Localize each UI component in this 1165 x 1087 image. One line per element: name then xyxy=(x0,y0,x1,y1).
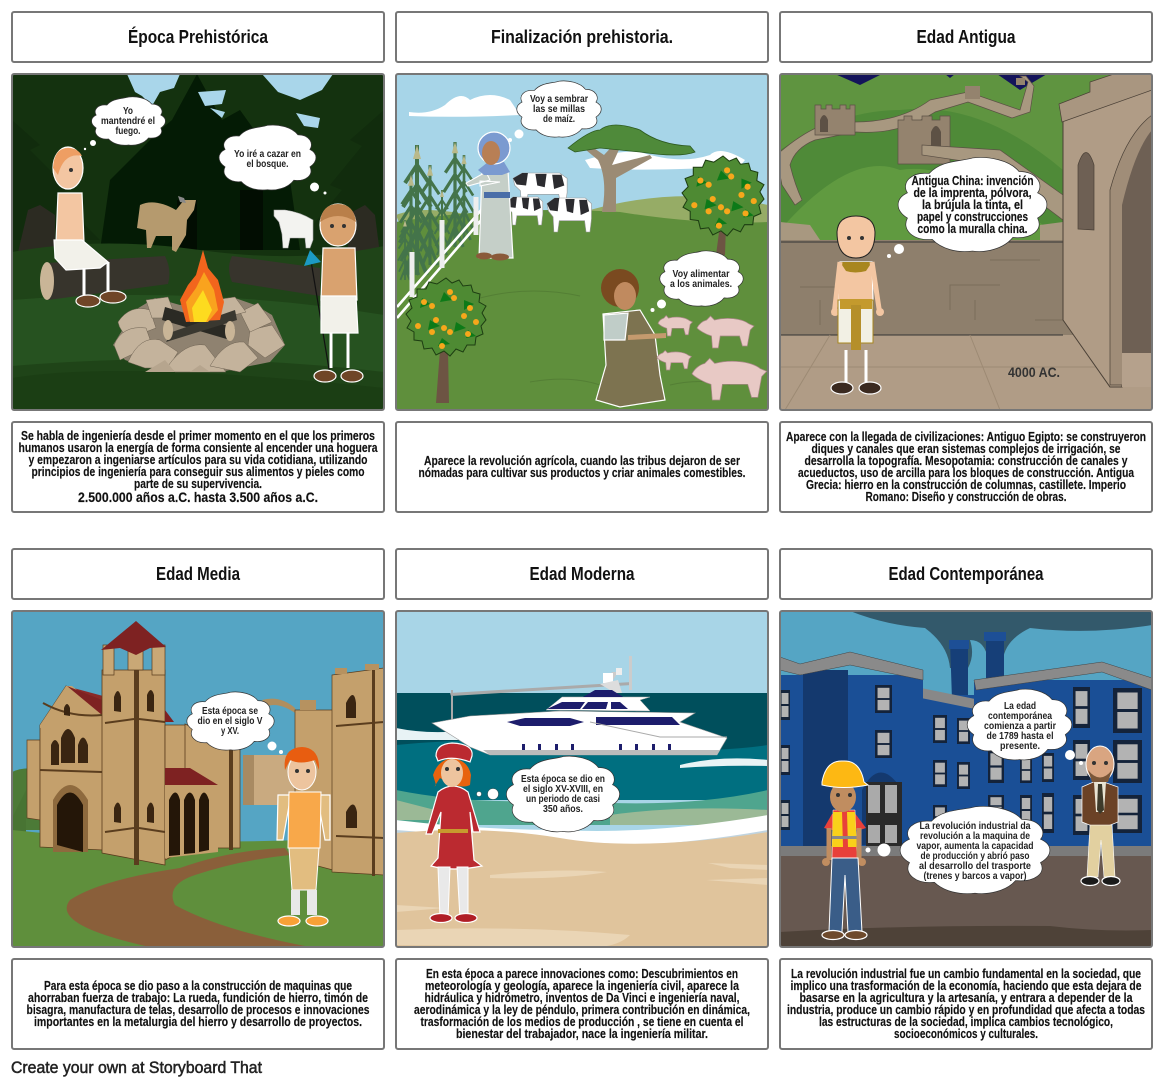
thought bubble: sembrar: de maíz. xyxy=(543,113,575,125)
text block: Época Prehistórica description: humanos usaron la energía de forma consiente al encender una hoguera xyxy=(18,441,378,455)
panel: medieval castle scene xyxy=(12,611,384,947)
thought bubble: edad contemporánea: La edad xyxy=(1004,700,1036,712)
thought bubble: Antigua China: Antigua China: invención xyxy=(912,174,1034,188)
thought bubble: cazar: Yo iré a cazar en xyxy=(234,148,301,160)
thought bubble: revolución industrial: al desarrollo del trasporte xyxy=(919,860,1031,872)
path: dirt road xyxy=(67,848,310,947)
building: factory xyxy=(780,652,1152,856)
thought bubble: Antigua China: como la muralla china. xyxy=(918,222,1028,236)
text block: Edad Media description: bisagra, manufactura de telas, desarrollo de procesos e innovaciones xyxy=(26,1003,370,1017)
title: Edad Moderna xyxy=(396,549,768,599)
thought bubble: fuego: Yo xyxy=(123,105,133,117)
thought bubble: alimentar: Voy alimentar xyxy=(672,268,730,280)
thought bubble: sembrar xyxy=(508,81,601,142)
title: Edad Media: Edad Media xyxy=(156,564,241,584)
icon: goat xyxy=(137,196,196,252)
icon: fence xyxy=(397,197,483,318)
thought bubble: revolución industrial: La revolución industrial da xyxy=(920,820,1031,832)
thought bubble: revolución industrial: revolución a la maquina de xyxy=(920,830,1030,842)
thought bubble: revolución industrial xyxy=(866,806,1050,894)
title: Edad Media xyxy=(12,549,384,599)
thought bubble: siglo V y XV xyxy=(187,692,283,754)
character: woman xyxy=(466,132,513,260)
icon: smoke xyxy=(850,611,1152,668)
panel: industrial factory scene xyxy=(780,611,1152,947)
text block: Edad Moderna description: hidráulica y hidrómetro, inventos de Da Vinci e ingeniería naval, xyxy=(424,991,740,1005)
text block: Finalización prehistoria description xyxy=(396,422,768,512)
thought bubble: revolución industrial: (trenes y barcos a vapor) xyxy=(924,870,1026,882)
text block: Edad Antigua description xyxy=(780,422,1152,512)
character: man in orange vest xyxy=(277,747,330,926)
text block: Edad Moderna description xyxy=(396,959,768,1049)
text block: Edad Antigua description: Romano: Diseño y construcción de obras. xyxy=(866,490,1066,504)
thought bubble: revolución industrial: de producción y abrió paso xyxy=(920,850,1030,862)
title: Época Prehistórica: Época Prehistórica xyxy=(128,26,269,47)
thought bubble: fuego: fuego. xyxy=(116,125,141,137)
text block: Finalización prehistoria description: Aparece la revolución agrícola, cuando las tribus dejaron de ser xyxy=(424,454,740,468)
thought bubble: edad contemporánea: contemporánea xyxy=(988,710,1052,722)
icon: cows xyxy=(507,173,591,232)
panel: beach yacht scene xyxy=(396,611,768,947)
icon: stones ring xyxy=(113,297,285,372)
text block: Edad Contemporánea description xyxy=(780,959,1152,1049)
panel: great wall scene xyxy=(780,72,1152,410)
icon: campfire xyxy=(162,250,237,342)
panel: farming scene xyxy=(396,74,768,410)
thought bubble: siglo V y XV: y XV. xyxy=(221,725,239,737)
thought bubble: siglo V y XV: dio en el siglo V xyxy=(198,715,262,727)
character: egyptian man xyxy=(831,216,884,394)
thought bubble: siglo XV-XVIII xyxy=(476,756,620,832)
text block: Edad Media description: Para esta época se dio paso a la construcción de maquinas que xyxy=(44,979,352,993)
text block: Edad Moderna description: En esta época a parece innovaciones como: Descubrimientos en xyxy=(426,967,738,981)
icon: pigs xyxy=(657,316,767,400)
icon: wall towers xyxy=(815,78,1063,220)
thought bubble: cazar xyxy=(219,125,326,194)
text block: Edad Moderna description: meteorología y geología, aparece la ingeniería civil, aparece la xyxy=(425,979,740,993)
text block: Finalización prehistoria description: nómadas para cultivar sus productos y criar animales comestibles. xyxy=(418,466,746,480)
thought bubble: Antigua China xyxy=(887,157,1047,258)
icon: sheep xyxy=(274,210,313,248)
thought bubble: edad contemporánea xyxy=(967,689,1083,765)
text block: Época Prehistórica description: y empezaron a ingeniarse artículos para su vida cotidiana, utilizando xyxy=(28,453,368,467)
icon: orange tree left xyxy=(406,278,486,403)
icon: orange tree right xyxy=(682,156,764,255)
character: older man in suit xyxy=(1081,746,1120,886)
thought bubble: revolución industrial: vapor, aumenta la capacidad xyxy=(916,840,1034,852)
thought bubble: fuego: mantendré el xyxy=(101,115,155,127)
text block: Edad Moderna description: aerodinámica y la ley de péndulo, primera contribución en dinámica, xyxy=(414,1003,750,1017)
thought bubble: siglo XV-XVIII: el siglo XV-XVIII, en xyxy=(523,783,603,795)
title: Edad Contemporánea: Edad Contemporánea xyxy=(888,564,1044,584)
thought bubble: alimentar: a los animales. xyxy=(670,278,732,290)
text block: Época Prehistórica description: 2.500.000 años a.C. hasta 3.500 años a.C. xyxy=(78,489,318,505)
thought bubble: siglo XV-XVIII: Esta época se dio en xyxy=(521,773,605,785)
text block: Edad Media description xyxy=(12,959,384,1049)
thought bubble: Antigua China: papel y construcciones xyxy=(917,210,1028,224)
text block: Época Prehistórica description: parte de su supervivencia. xyxy=(134,477,262,491)
title: Edad Antigua: Edad Antigua xyxy=(916,27,1016,47)
thought bubble: sembrar: las se millas xyxy=(533,103,585,115)
character: seated man xyxy=(53,147,126,307)
thought bubble: siglo XV-XVIII: 350 años. xyxy=(543,803,583,815)
thought bubble: Antigua China: de la imprenta, pólvora, xyxy=(914,186,1032,200)
thought bubble: Antigua China: la brújula la tinta, el xyxy=(922,198,1023,212)
title: Finalización prehistoria: Finalización prehistoria. xyxy=(491,27,673,47)
title: Finalización prehistoria xyxy=(396,12,768,62)
thought bubble: cazar: el bosque. xyxy=(246,158,289,170)
thought bubble: edad contemporánea: presente. xyxy=(1000,740,1040,752)
title: Edad Moderna: Edad Moderna xyxy=(530,564,635,584)
title: Edad Antigua xyxy=(780,12,1152,62)
text block: Edad Contemporánea description: socioeconómicos y culturales. xyxy=(894,1027,1038,1041)
icon: yacht xyxy=(432,656,727,755)
icon: corn field xyxy=(398,142,474,280)
building: far wall and arch xyxy=(243,664,384,876)
thought bubble: edad contemporánea: de 1789 hasta el xyxy=(986,730,1054,742)
character: renaissance man xyxy=(426,743,482,922)
text block: Época Prehistórica description: Se habla de ingeniería desde el primer momento en el que los primeros xyxy=(21,429,375,443)
text block: Época Prehistórica description xyxy=(12,422,384,512)
thought bubble: alimentar xyxy=(650,251,743,312)
thought bubble: siglo XV-XVIII: un periodo de casi xyxy=(526,793,600,805)
text block: Edad Moderna description: bienestar del trabajador, nace la ingeniería militar. xyxy=(456,1027,708,1041)
text block: Época Prehistórica description: principios de ingeniería para conseguir sus alimentos y pieles como xyxy=(32,465,365,479)
text block: Edad Moderna description: trasformación de los medios de producción , se tiene en cuenta el xyxy=(420,1015,744,1029)
character: kneeling boy xyxy=(596,269,666,407)
panel: forest campfire scene xyxy=(12,74,384,410)
building: right tower xyxy=(1059,72,1152,387)
title: Edad Contemporánea xyxy=(780,549,1152,599)
character: standing man with spear xyxy=(304,204,363,382)
title: Época Prehistórica xyxy=(12,12,384,62)
character: construction worker xyxy=(822,761,868,940)
icon: chimneys xyxy=(949,632,1006,700)
icon: acacia tree xyxy=(568,125,695,212)
thought bubble: fuego xyxy=(84,97,165,150)
text block: Edad Media description: importantes en la metalurgia del hierro y desarrollo de proyectos. xyxy=(34,1015,362,1029)
date label: 4000 AC: 4000 AC. xyxy=(1008,364,1060,380)
text block: Edad Media description: ahorraban fuerza de trabajo: La rueda, fundición de hierro, timón de xyxy=(28,991,368,1005)
footer: Storyboard That credit: Create your own at Storyboard That xyxy=(11,1059,262,1077)
thought bubble: edad contemporánea: comienza a partir xyxy=(984,720,1056,732)
thought bubble: sembrar: Voy a sembrar xyxy=(530,93,588,105)
thought bubble: siglo V y XV: Esta época se xyxy=(202,705,258,717)
building: church xyxy=(27,621,240,865)
